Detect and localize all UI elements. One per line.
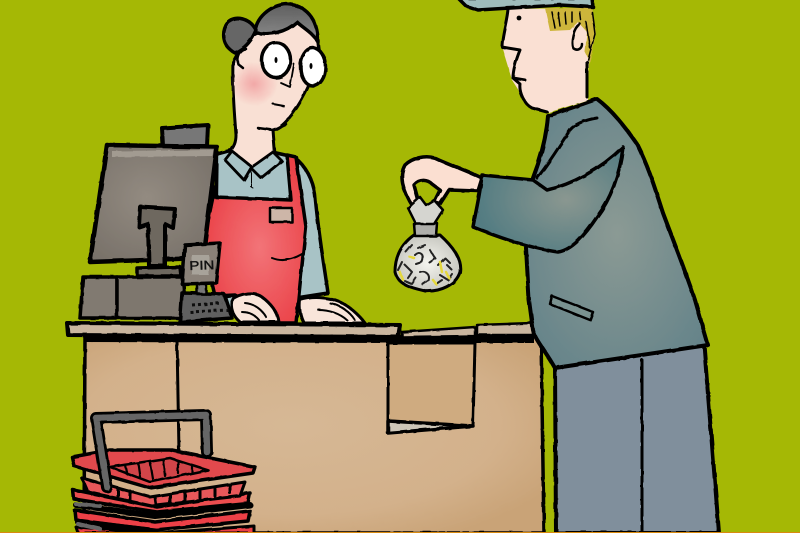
card terminal stem [197, 282, 206, 294]
basket mesh [118, 486, 230, 504]
customer cap [458, 0, 593, 10]
counter top middle [402, 327, 475, 337]
bag top tuft [408, 197, 443, 224]
cashier ear [237, 49, 246, 68]
cashier hair [255, 4, 318, 42]
jacket pocket [550, 296, 593, 320]
shopping baskets [72, 415, 255, 533]
cashier right pupil [310, 63, 312, 69]
monitor base [137, 267, 181, 276]
counter body [84, 336, 544, 533]
cashier hair bun [224, 18, 256, 53]
cashier blush [230, 62, 278, 106]
basket handle [96, 415, 207, 487]
customer hair [545, 8, 596, 62]
customer ear [572, 24, 582, 50]
monitor top edge [112, 150, 214, 157]
cash drawer opening [388, 421, 473, 433]
top basket rim [72, 450, 255, 488]
keypad keys [190, 303, 228, 312]
cashier left pupil [274, 57, 278, 63]
cashier shirt [215, 150, 328, 298]
yellow coin glints [400, 257, 449, 284]
apron crease [272, 254, 302, 260]
cashier mouth [273, 104, 284, 106]
stack shadows [76, 505, 250, 531]
figure: cashier [203, 4, 365, 323]
bag of coins [395, 197, 460, 291]
counter under-shadow band [84, 339, 534, 340]
coins inside bag [398, 245, 452, 284]
customer hand [402, 157, 482, 207]
register drawer left [80, 277, 117, 318]
cashier chin [258, 124, 286, 130]
shirt button [250, 170, 253, 188]
jacket collar seam [537, 118, 597, 178]
counter panel seam [177, 340, 179, 452]
checkout counter [67, 323, 544, 533]
top basket side [82, 478, 245, 506]
grey basket handles [76, 504, 100, 529]
customer jacket [526, 99, 708, 368]
cashier apron [203, 155, 306, 323]
lower stacked baskets [73, 490, 250, 512]
trouser leg seam [640, 360, 644, 533]
cashier left glasses lens [262, 42, 290, 78]
card terminal screen [182, 243, 220, 284]
cashier nose [281, 64, 294, 87]
figure: customer [395, 0, 719, 533]
PIN label: PIN [189, 258, 215, 273]
customer face outline [502, 9, 587, 112]
customer skin fill [502, 8, 590, 113]
bag knot [414, 223, 437, 236]
monitor stand [139, 207, 175, 266]
cash drawer flap [388, 343, 475, 426]
basket handle outline [96, 415, 207, 487]
shirt cuff [220, 296, 233, 313]
bag body [395, 235, 460, 291]
card terminal keypad [180, 293, 232, 322]
register drawer right [117, 277, 186, 318]
cashier right glasses lens [300, 48, 326, 86]
name badge [270, 208, 292, 222]
counter top left [67, 323, 400, 337]
terminal screen highlight [192, 255, 209, 275]
cashier collar [225, 151, 282, 180]
finger lines [242, 303, 355, 320]
cashier right hand [300, 298, 365, 323]
customer sleeve [473, 147, 623, 252]
customer hair strands [552, 12, 595, 60]
monitor back [90, 145, 217, 262]
counter top right [477, 323, 533, 335]
customer trousers [555, 344, 719, 533]
cashier left hand [231, 294, 279, 322]
inner mesh [125, 460, 192, 479]
customer eye [517, 16, 521, 20]
register top display [162, 125, 208, 146]
cashier face and neck [230, 22, 320, 167]
cash register [80, 125, 232, 322]
bottom edge line [0, 532, 800, 533]
basket inner [110, 458, 208, 482]
